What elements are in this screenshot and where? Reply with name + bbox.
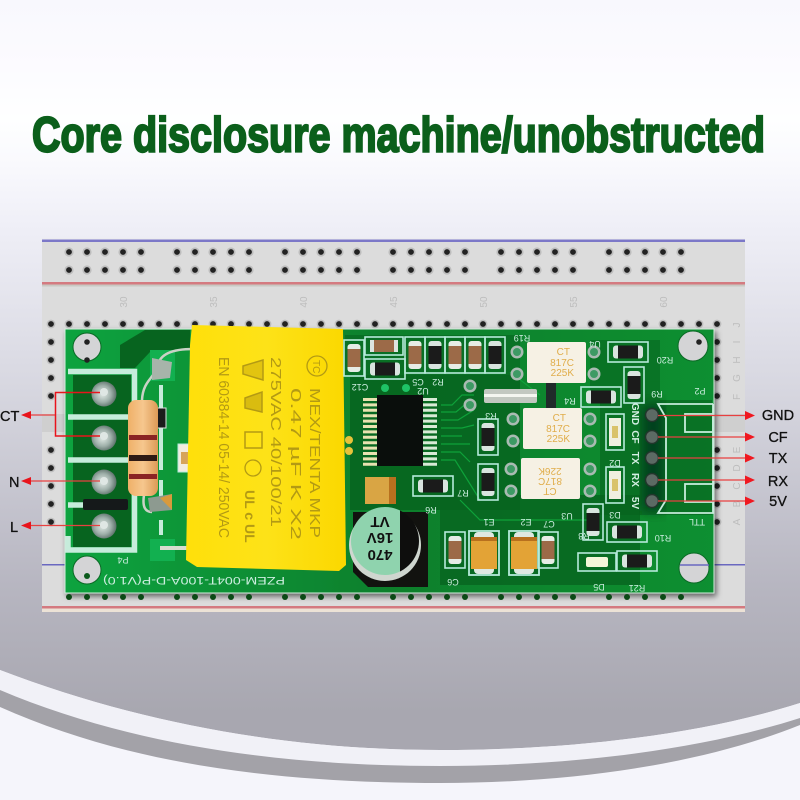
header pin labels — [629, 403, 640, 509]
silkscreen reference labels: U4 — [589, 339, 601, 349]
grey swoosh band — [0, 690, 800, 783]
silkscreen reference labels: D3 — [609, 510, 621, 520]
optocoupler U3: 817C — [538, 475, 562, 486]
header pin labels: RX — [629, 473, 640, 487]
silkscreen reference labels — [103, 333, 706, 593]
surface mount parts row — [344, 337, 505, 392]
callout: RX arrow: RX — [768, 474, 788, 490]
optocoupler U1: 225K — [547, 434, 570, 445]
main IC U2 — [345, 395, 430, 466]
silkscreen reference labels: R3 — [485, 411, 497, 421]
optocoupler U3: 226K — [538, 465, 562, 476]
silkscreen reference labels: P4 — [117, 555, 129, 565]
mounting holes — [73, 331, 709, 584]
right TTL header silkscreen — [658, 404, 713, 513]
callout: 5V arrow — [658, 494, 787, 510]
capacitor markings: MEX/TENTA MKP — [306, 388, 323, 538]
callout: TX arrow — [658, 451, 788, 467]
terminal block silkscreen — [68, 372, 134, 550]
silkscreen line and pads near resistor — [142, 349, 193, 561]
terminal screws — [92, 382, 116, 538]
breadboard: row letters: E — [732, 446, 743, 453]
breadboard: row letters: A — [732, 518, 743, 525]
silkscreen reference labels: C5 — [412, 377, 424, 387]
silkscreen reference labels: R10 — [655, 533, 671, 543]
breadboard: column numbers: 30 — [119, 296, 130, 308]
callout: RX arrow — [658, 474, 788, 490]
callout: N arrow: N — [9, 475, 19, 491]
silkscreen reference labels: R20 — [657, 355, 673, 365]
electrolytic capacitor: 16V — [367, 529, 393, 546]
optocoupler U3: CT — [543, 485, 557, 496]
breadboard: column numbers: 60 — [659, 296, 670, 308]
electrolytic capacitor — [349, 477, 428, 587]
silkscreen reference labels: R21 — [629, 583, 645, 593]
capacitor markings: UL c UL — [242, 490, 258, 543]
silkscreen reference labels: R8 — [578, 531, 590, 541]
crystal — [464, 380, 537, 412]
silkscreen reference labels: PZEM-004T-100A-D-P(V1.0) — [103, 574, 285, 586]
callout: N arrow — [9, 475, 100, 491]
silkscreen reference labels: TTL — [689, 517, 705, 527]
silkscreen reference labels: C12 — [352, 382, 368, 392]
silkscreen reference labels: R2 — [432, 377, 444, 387]
breadboard: row letters: F — [732, 394, 743, 400]
white swoosh band — [0, 670, 800, 766]
capacitor markings: EN 60384-14 05-14/ 250VAC — [215, 357, 232, 538]
callout: GND arrow — [658, 408, 794, 424]
capacitor markings: 0.47 µF K X2 — [287, 388, 304, 540]
silkscreen reference labels: D5 — [593, 582, 605, 592]
PCB traces — [441, 372, 590, 520]
header pin labels: 5V — [629, 497, 640, 509]
callout: 5V arrow: 5V — [769, 494, 787, 510]
power resistor — [128, 400, 158, 496]
PCB dark copper zones — [73, 330, 712, 585]
electrolytic capacitor: VT — [370, 513, 390, 530]
optocoupler U1: CT — [553, 413, 566, 424]
breadboard: main hole grid upper — [42, 315, 726, 405]
callout: CF arrow — [658, 430, 788, 446]
callout: L arrow — [10, 520, 100, 536]
electrolytic capacitor: 470 — [367, 546, 393, 563]
silkscreen reference labels: E2 — [520, 517, 532, 527]
silkscreen reference labels: R7 — [457, 488, 469, 498]
breadboard: column numbers: 55 — [569, 296, 580, 308]
PCB board — [65, 329, 714, 593]
silkscreen reference labels: U3 — [561, 511, 573, 521]
breadboard: top rail holes — [60, 243, 690, 279]
optocoupler U4: CT — [557, 347, 570, 358]
silkscreen reference labels: D2 — [609, 458, 621, 468]
silkscreen reference labels: P2 — [694, 386, 706, 396]
bottom rail holes under PCB — [60, 590, 690, 604]
yellow X2 capacitor — [186, 325, 346, 571]
callout: TX arrow: TX — [769, 451, 788, 467]
optocoupler U4 — [510, 342, 600, 383]
callout: L arrow: L — [10, 520, 18, 536]
silkscreen reference labels: C7 — [543, 519, 555, 529]
header pin labels: GND — [629, 403, 640, 425]
pin header shadow — [642, 405, 664, 511]
header pin labels: CF — [629, 430, 640, 444]
breadboard: row letters: H — [732, 356, 743, 364]
silkscreen reference labels: C6 — [447, 577, 459, 587]
breadboard: row letters: I — [732, 341, 743, 343]
silkscreen reference labels: U2 — [417, 386, 429, 396]
capacitor markings — [215, 356, 327, 543]
capacitor markings: TC — [310, 360, 321, 373]
header pin labels: TX — [629, 452, 640, 465]
silkscreen reference labels: R6 — [425, 505, 437, 515]
PCB module — [65, 325, 714, 593]
optocoupler U4: 225K — [551, 368, 574, 379]
breadboard: row letters: B — [732, 500, 743, 507]
optocoupler U4: 817C — [550, 358, 574, 369]
silkscreen reference labels: R19 — [514, 333, 530, 343]
breadboard: column numbers — [119, 296, 670, 308]
silkscreen reference labels: E1 — [483, 517, 495, 527]
breadboard: column numbers: 50 — [479, 296, 490, 308]
callout: CF arrow: CF — [768, 430, 788, 446]
breadboard: row letters: D — [732, 464, 743, 472]
callout: CT bracket and arrow: CT — [0, 409, 19, 425]
silkscreen reference labels: R4 — [564, 396, 576, 406]
breadboard: row letters: J — [732, 322, 743, 328]
callout: GND arrow: GND — [762, 408, 794, 424]
breadboard: row letters: C — [732, 482, 743, 490]
capacitor markings: 275VAC 40/100/21 — [267, 357, 284, 527]
breadboard: column numbers: 40 — [299, 296, 310, 308]
breadboard: row letters: G — [732, 374, 743, 382]
small resistors and LEDs — [413, 342, 657, 571]
header pins — [646, 408, 658, 508]
terminal diode marker — [83, 499, 128, 510]
breadboard: column numbers: 45 — [389, 296, 400, 308]
breadboard: main hole grid lower — [42, 441, 726, 531]
silkscreen reference labels: R9 — [651, 389, 663, 399]
callout: CT bracket and arrow — [0, 392, 100, 436]
breadboard: row letters — [732, 322, 743, 525]
optocoupler U1 — [506, 383, 596, 449]
breadboard — [42, 238, 745, 612]
optocoupler U1: 817C — [546, 424, 570, 435]
optocoupler U3 — [504, 458, 596, 499]
breadboard: column numbers: 35 — [209, 296, 220, 308]
tantalum capacitors — [469, 531, 539, 575]
